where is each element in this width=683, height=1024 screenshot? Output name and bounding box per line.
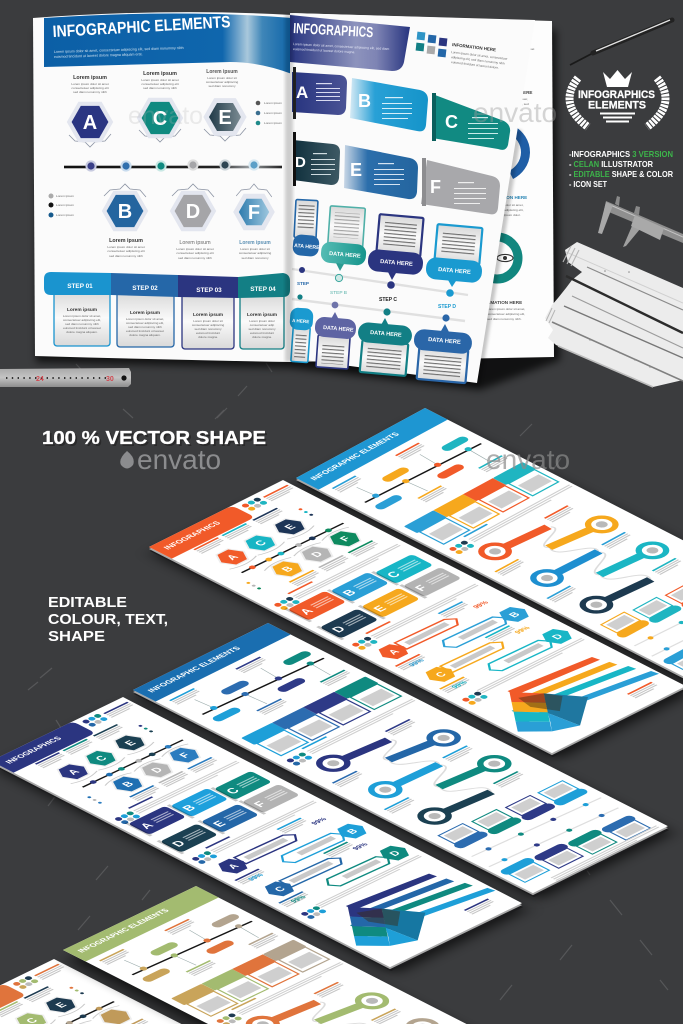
hexagon D (170, 191, 216, 231)
step tabs: STEP 04 (250, 286, 276, 293)
scroll B: B (358, 91, 371, 111)
icon: pen (570, 20, 672, 65)
lower box text lines (294, 334, 462, 379)
keyhole pins (466, 499, 683, 620)
hexagon captions: Lorem ipsum dolor sit amet (71, 82, 109, 86)
timeline nodes and step labels: STEP B (330, 290, 347, 296)
bar letters (226, 816, 404, 904)
hexagon C (137, 98, 183, 138)
right page text fragments: ipsum dolor. (504, 213, 521, 217)
step box text: Lorem ipsum (193, 312, 223, 318)
panel: ruler: 24 (36, 376, 44, 383)
scroll E: E (350, 160, 362, 180)
step box text: Lorem ipsum dolor sit (193, 319, 223, 323)
hexagon captions: Lorem ipsum dolor sit amet (176, 247, 214, 251)
header (296, 408, 448, 490)
keyhole pins (233, 976, 465, 1024)
scroll letters: A (296, 606, 317, 617)
header: Infographics (290, 15, 410, 71)
hexagon D: D (186, 201, 200, 223)
hexagon captions: Lorem ipsum (179, 240, 211, 246)
legend left: Lorem ipsum (56, 194, 74, 198)
hexagon timeline (0, 962, 163, 1024)
step box text: sed diam nonummy (194, 327, 222, 331)
legend left: Lorem ipsum (56, 203, 74, 207)
scroll E (344, 145, 418, 199)
hexagon captions: Lorem ipsum dolor sit amet (107, 245, 145, 249)
right page text fragments: sed diam nonummy nibh. (487, 317, 522, 321)
step box text: Lorem ipsum (67, 307, 97, 313)
upper data pills: DATA HERE (438, 267, 471, 276)
header: Infographics: euismod tincidunt ut laoreet dolore magna (293, 47, 355, 54)
header: Infographics: Lorem ipsum dolor sit amet, consectetuer adipiscing elit, sed diam (293, 42, 390, 51)
step box text: euismod tincidunt ut laoreet (63, 326, 101, 330)
panel: ruler (0, 368, 131, 387)
hexagon captions: Lorem ipsum (206, 69, 238, 75)
hexagon B: B (118, 201, 132, 223)
sheet 4 shadow (0, 699, 526, 974)
scroll C: C (445, 112, 458, 132)
envato watermark on left page: envato (128, 102, 203, 130)
scroll cards (123, 766, 302, 854)
hexagon letters: E (282, 523, 299, 532)
data boxes (596, 562, 683, 680)
percent labels (222, 817, 396, 904)
step box text: consectetuer adipiscing elit, (63, 318, 101, 322)
scroll cards (283, 549, 464, 640)
bar letters: B (345, 828, 361, 836)
feature list (569, 149, 673, 189)
panel: sheet 1 blue infographic elements (296, 408, 683, 683)
sheet 6 shadow (0, 969, 460, 1024)
sheet 2 shadow (149, 482, 683, 760)
right page text fragments (487, 47, 534, 321)
header (0, 984, 26, 1024)
lower data pills: DATA HERE (428, 337, 461, 346)
bar letters: A (226, 863, 242, 871)
step box text: consectetuer adipiscing (192, 323, 224, 327)
hexagon captions: consectetuer adipiscing elit (141, 82, 179, 86)
scroll letters: B (179, 803, 199, 813)
step box text: euismod tincidunt (196, 331, 220, 335)
hexagon letters: C (252, 539, 270, 548)
legend right: Lorem ipsum (264, 121, 282, 125)
scroll A: A (296, 83, 308, 102)
lower data pills: DATA HERE (370, 330, 402, 339)
percent labels: 99% (290, 895, 308, 904)
hexagon letters: B (279, 565, 297, 574)
scroll C (432, 93, 510, 150)
timeline (64, 159, 282, 172)
3D stair chart (457, 636, 672, 745)
right page text fragments: consectetuer adipiscing elit, (487, 312, 525, 316)
header: INFOGRAPHIC ELEMENTS (146, 645, 243, 694)
section header (281, 696, 422, 766)
hexagon bars (364, 589, 577, 697)
header (133, 623, 291, 702)
section header 2 (347, 581, 485, 650)
legend right (256, 101, 282, 125)
header (149, 505, 255, 559)
step tabs (44, 272, 290, 298)
right page text fragments: ION HERE (505, 195, 527, 200)
watermark tick marks (28, 363, 668, 1000)
blue arc behind sheet (511, 130, 525, 175)
step box text: dolore magna. (252, 335, 272, 339)
panel: ruler: 30 (106, 376, 114, 383)
step box text: dolore magna. (198, 335, 218, 339)
feature list: -INFOGRAPHICS 3 VERSION (569, 149, 673, 159)
header: INFOGRAPHICS (162, 520, 223, 551)
information text: Lorem ipsum dolor sit amet, consectetuer (451, 50, 508, 61)
bar letters and percents: D (550, 633, 566, 641)
hexagon letters: E (54, 1001, 70, 1010)
hexagon letters: D (309, 550, 326, 559)
heading: 100 % vector shape: 100 % VECTOR SHAPE (42, 427, 266, 448)
scroll letters: B (339, 587, 360, 598)
hexagon captions: Lorem ipsum dolor sit (240, 247, 270, 251)
sheet page (0, 697, 522, 967)
hexagon letters: D (149, 766, 166, 775)
step tabs: STEP 02 (132, 285, 158, 292)
hexagon letters: C (94, 754, 111, 763)
badge title: INFOGRAPHICS (578, 89, 655, 101)
timeline (99, 903, 282, 993)
icon: caliper (598, 196, 683, 247)
hexagon captions: Lorem ipsum (239, 240, 271, 246)
step box text: sed diam nonummy nibh (65, 322, 99, 326)
legend right: Lorem ipsum (264, 111, 282, 115)
hexagon captions: sed diam nonummy nibh (73, 90, 107, 94)
upper data pills (292, 234, 483, 287)
heading: editable colour, text, shape: COLOUR, TEXT, (48, 612, 168, 628)
keyhole pins (303, 713, 537, 830)
bar letters and percents: B (507, 611, 523, 619)
3D stair chart (296, 853, 508, 959)
header: INFOGRAPHIC ELEMENTS (75, 907, 171, 954)
legend right: Lorem ipsum (264, 101, 282, 105)
information text (451, 42, 508, 70)
hexagon letters: A (66, 768, 83, 776)
right page text fragments: dolor sit amet, (504, 203, 524, 207)
heading: 100 % vector shape: 100 % VECTOR SHAPE (44, 429, 268, 450)
scroll letters: F (412, 583, 431, 593)
colour squares (416, 32, 447, 57)
panel: sheet 3 navy infographic elements (133, 623, 668, 893)
hexagon E: E (218, 107, 232, 129)
upper box text lines (297, 204, 476, 255)
percent labels: 99% (472, 600, 491, 610)
scroll letters: C (222, 785, 243, 796)
panel: magazine right page (290, 13, 554, 362)
step box text: dolore magna aliquam. (66, 330, 98, 334)
panel: sheet 6 orange infographics (0, 959, 454, 1024)
hexagon captions: sed diam nonummy (242, 256, 269, 260)
feature list: - ICON SET (569, 179, 607, 189)
feature list: - EDITABLE SHAPE & COLOR (569, 169, 673, 179)
hexagon captions: consectetuer adipiscing elit (107, 249, 145, 253)
hexagon timeline (167, 483, 392, 598)
legend left: Lorem ipsum (56, 213, 74, 217)
right page text fragments: Lorem ipsum dolor sit amet (497, 47, 534, 51)
connector brackets (69, 128, 272, 197)
upper data pills: DATA HERE (380, 259, 413, 268)
hexagon captions: consectetuer adipiscing (206, 80, 238, 84)
hexagon captions: Lorem ipsum dolor sit amet (141, 78, 179, 82)
hexagon captions: consectetuer adipiscing (239, 251, 271, 255)
hexagon captions: sed diam nonummy nibh (143, 86, 177, 90)
hexagon captions: Lorem ipsum (73, 75, 107, 81)
percent labels: 99% (352, 842, 370, 851)
sheet page (149, 480, 683, 753)
step box text: Lorem ipsum dolor sit amet, (126, 317, 164, 321)
timeline nodes and step labels: STEP D (438, 304, 456, 310)
header (63, 886, 219, 962)
envato watermark under heading: envato (137, 444, 221, 475)
step box text: consectetuer adipiscing elit, (126, 321, 164, 325)
icon: rolled papers (545, 242, 683, 387)
hexagon captions: consectetuer adipiscing elit (176, 251, 214, 255)
percent labels (382, 600, 559, 690)
step tabs and boxes (171, 940, 331, 1018)
hexagon bars (204, 806, 414, 911)
hexagon captions: Lorem ipsum (143, 71, 177, 77)
panel: sheet 5 green infographic elements (63, 886, 596, 1024)
bar letters and percents: C (433, 671, 450, 679)
hexagon captions: sed diam nonummy nibh (178, 256, 212, 260)
panel: sheet 2 orange infographics (149, 480, 683, 753)
sheet shadow (292, 130, 522, 387)
right page text fragments: RMATION HERE (487, 300, 522, 305)
scroll D: D (295, 154, 306, 171)
right page text fragments: Lorem ipsum dolor sit amet, (487, 307, 525, 311)
lower data pills: A HERE (292, 318, 309, 324)
icon: left laurel (570, 78, 588, 127)
section header (109, 758, 246, 825)
step box text (63, 307, 277, 339)
sheet 5 shadow (69, 896, 602, 1024)
hexagon captions: sed diam nonummy (208, 84, 236, 88)
scroll F: F (430, 177, 441, 197)
step box text: sed diam nonummy (248, 327, 276, 331)
panel: sheet 4 navy infographics (0, 697, 522, 967)
right page text fragments: ERE (523, 90, 532, 95)
step box text: Lorem ipsum dolor (249, 319, 275, 323)
lower data pills (289, 307, 473, 354)
percent labels: 99% (247, 873, 265, 882)
hexagon captions (71, 69, 271, 260)
scroll letters: D (329, 624, 349, 634)
hexagon A (67, 102, 113, 142)
bar letters: D (387, 850, 404, 858)
envato watermark, right of magazine: envato (473, 97, 557, 128)
scroll B (350, 78, 428, 131)
timeline nodes and step labels: STEP C (379, 297, 397, 303)
header (0, 721, 95, 773)
data boxes (433, 776, 662, 891)
timeline (332, 426, 511, 521)
percent labels: 99% (451, 680, 469, 690)
step tabs: STEP 01 (67, 283, 93, 290)
scroll letters (295, 566, 431, 634)
percent labels: 99% (310, 817, 329, 826)
envato watermark over sheet 1: envato (486, 444, 570, 475)
hexagon C: C (153, 108, 167, 130)
right page text fragments: , sed (522, 102, 529, 106)
section header (269, 541, 407, 611)
percent labels: 99% (408, 658, 426, 668)
hexagon B (102, 191, 148, 231)
header: INFOGRAPHIC ELEMENTS (308, 431, 402, 482)
feature list: - CELAN ILLUSTRATOR (569, 159, 653, 169)
scroll letters: E (209, 819, 229, 829)
panel: magazine left page (33, 12, 292, 362)
step box text: sed diam nonummy nibh (128, 325, 162, 329)
upper data pills: ATA HERE (294, 243, 320, 251)
scroll letters: A (137, 820, 157, 831)
bar letters and percents (386, 599, 566, 690)
badge stripes (600, 112, 635, 122)
section header (444, 482, 579, 555)
hexagon timeline (8, 700, 231, 812)
information text: adipiscing elit, sed diam nonummy nibh (451, 55, 505, 66)
hexagon letters: B (120, 780, 137, 789)
right page text fragments: tuer, (522, 97, 528, 101)
hexagon letters (0, 1001, 110, 1024)
sheet 3 shadow (133, 625, 672, 900)
heading: editable colour, text, shape: SHAPE (48, 629, 105, 645)
legend left (48, 194, 74, 218)
step box text: consectetuer adip (250, 323, 274, 327)
sheet page (63, 886, 596, 1024)
lower data pills: DATA HERE (323, 325, 354, 334)
header band (44, 13, 292, 74)
badge title: ELEMENTS (588, 100, 646, 112)
scroll D (293, 132, 340, 186)
section header (211, 959, 350, 1024)
sheet page (0, 959, 454, 1024)
step boxes (54, 290, 284, 349)
hexagon captions: sed diam nonummy nibh (109, 254, 143, 258)
header band: INFOGRAPHIC ELEMENTS (52, 13, 231, 41)
hexagon letters: F (178, 752, 193, 760)
bar letters and percents: A (386, 648, 403, 656)
header band: euismod tincidunt ut laoreet dolore magna aliquam erat. (54, 52, 143, 59)
hexagon letters: F (337, 535, 354, 543)
hexagon F (233, 194, 275, 230)
step tabs and boxes (241, 676, 403, 757)
header: Infographics: INFOGRAPHICS (293, 21, 374, 41)
scroll letters: C (383, 569, 404, 580)
scroll letters: E (370, 604, 390, 614)
panel: flipped right sheet (289, 13, 535, 383)
upper data boxes (294, 199, 482, 265)
hexagon captions: consectetuer adipiscing elit (71, 86, 109, 90)
heading: editable colour, text, shape: EDITABLE (48, 595, 127, 611)
scroll A (292, 67, 347, 119)
information text: euismod tincidunt ut laoreet dolore. (451, 60, 499, 70)
sheet 1 shadow (296, 410, 683, 690)
hexagon letters: E (123, 739, 139, 748)
badge title (578, 89, 655, 112)
scroll F (421, 158, 500, 214)
hexagon letters: A (224, 553, 242, 562)
step box text: Lorem ipsum (247, 312, 277, 318)
section header 2 (187, 798, 323, 865)
hexagon E (203, 98, 247, 136)
percent labels: 99% (514, 626, 532, 635)
right page text fragments: adipiscing elit, (504, 208, 524, 212)
icon: right laurel (647, 78, 665, 127)
header: INFOGRAPHICS (3, 735, 64, 765)
heading: editable colour, text, shape (48, 595, 168, 645)
scroll letters: D (169, 838, 189, 849)
information text: INFORMATION HERE (452, 42, 496, 52)
upper data pills: DATA HERE (329, 251, 361, 260)
step box text: euismod tincidunt ut laoreet (126, 329, 164, 333)
timeline nodes and step labels: STEP (297, 281, 309, 286)
step box text: euismod tincidunt (250, 331, 274, 335)
header band: Lorem ipsum dolor sit amet, consectetuer adipiscing elit, sed diam nonummy nibh (54, 46, 184, 54)
bar letters: C (272, 885, 289, 893)
teal ring icon (476, 237, 518, 279)
icon: crown (603, 70, 632, 87)
timeline (169, 641, 354, 733)
hexagon captions: Lorem ipsum dolor sit (207, 76, 237, 80)
step box text: Lorem ipsum dolor sit amet, (63, 314, 101, 318)
step box text: Lorem ipsum (130, 310, 160, 316)
sheet page (296, 408, 683, 683)
timeline nodes and step labels (297, 267, 456, 322)
step tabs and boxes (404, 462, 560, 546)
hexagon captions: Lorem ipsum (109, 238, 143, 244)
progress tracks (292, 269, 468, 321)
scroll letters: F (250, 799, 269, 809)
spine shadow (285, 14, 293, 362)
eye icon (497, 254, 513, 262)
lower data boxes (291, 326, 468, 383)
step box text: dolore magna aliquam. (129, 333, 161, 337)
hexagon letters (223, 515, 356, 582)
scroll letters (135, 782, 270, 849)
hexagon F: F (248, 202, 260, 224)
sheet page (133, 623, 668, 893)
badge: infographics elements (570, 70, 665, 127)
step tabs: STEP 03 (196, 287, 222, 294)
hexagon letters (65, 732, 195, 796)
hexagon A: A (83, 112, 97, 134)
magazine drop shadow (36, 30, 560, 390)
